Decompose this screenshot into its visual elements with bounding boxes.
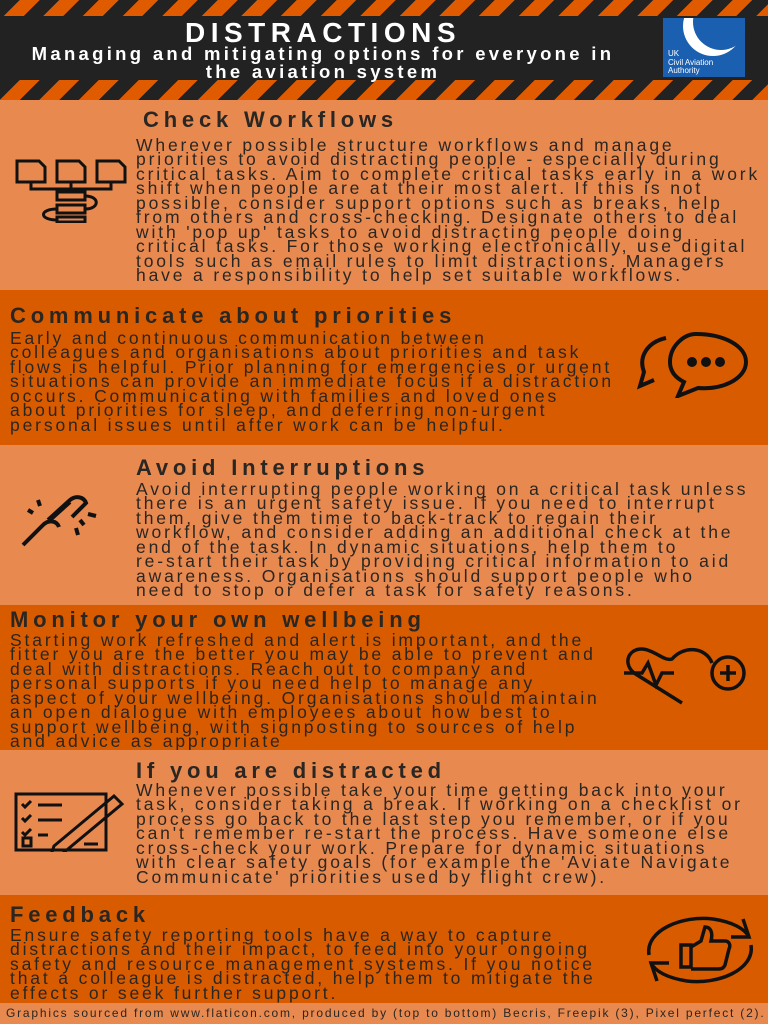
- text block: flows is helpful. Prior planning for emergencies or urgent: [10, 357, 612, 377]
- text block: from others and cross-checking. Designate others to deal: [136, 207, 739, 227]
- text block: [136, 479, 748, 600]
- icon: thumbs up cycle: [646, 916, 754, 984]
- text block: [10, 630, 600, 751]
- icon: broken chain: [22, 495, 96, 546]
- text block: distractions and their impact, to feed into your ongoing: [10, 939, 590, 959]
- panel: avoid interruptions: [0, 445, 768, 605]
- panel: if you are distracted: [0, 750, 768, 895]
- subtitle: the aviation system: [206, 61, 440, 82]
- text block: there is an urgent safety issue. If you need to interrupt: [136, 493, 717, 513]
- panel: monitor your own wellbeing: [0, 605, 768, 750]
- text block: Wherever possible structure workflows and manage: [136, 135, 675, 155]
- text block: have a responsibility to help set suitable workflows.: [136, 265, 683, 285]
- text block: Whenever possible take your time getting back into your: [136, 780, 728, 800]
- text block: fitter you are the better you may be able to prevent and: [10, 644, 596, 664]
- text block: that a colleague is distracted, help them to mitigate the: [10, 968, 596, 988]
- text block: safety and resource management systems. If you notice: [10, 954, 595, 974]
- subtitle: [32, 43, 614, 82]
- panel: communicate about priorities: [0, 290, 768, 445]
- text block: personal supports if you need help to manage any: [10, 673, 535, 693]
- text block: with clear safety goals (for example the 'Aviate Navigate: [136, 852, 732, 872]
- text block: [10, 925, 596, 1003]
- icon: checklist: [14, 792, 124, 852]
- text block: Starting work refreshed and alert is important, and the: [10, 630, 584, 650]
- heading: Monitor your own wellbeing: [10, 607, 426, 632]
- heading: If you are distracted: [136, 758, 446, 783]
- icon: heart with plus: [624, 647, 746, 704]
- subtitle: Managing and mitigating options for everyone in: [32, 43, 614, 64]
- icon: workflow: [16, 160, 126, 223]
- heading: Check Workflows: [143, 107, 398, 132]
- text block: colleagues and organisations about priorities and task: [10, 342, 581, 362]
- text block: critical tasks. For those working electronically, use digital: [136, 236, 747, 256]
- header: [0, 0, 768, 100]
- text block: an open dialogue with employees about how best to: [10, 702, 552, 722]
- logo: UK Civil Aviation Authority: Authority: [668, 66, 700, 75]
- text block: [136, 135, 760, 285]
- text block: with 'pop up' tasks to avoid distracting people doing: [136, 222, 685, 242]
- text block: awareness. Organisations should support people who: [136, 566, 695, 586]
- text block: shift when people are at their most alert. If this is not: [136, 178, 703, 198]
- text block: need to stop or defer a task for safety reasons.: [136, 580, 635, 600]
- text block: Communicate' priorities used by flight crew).: [136, 867, 607, 887]
- text block: Avoid interrupting people working on a critical task unless: [136, 479, 748, 499]
- text block: personal issues until after work can be helpful.: [10, 415, 506, 435]
- text block: Early and continuous communication between: [10, 328, 487, 348]
- text block: can't remember re-start the process. Have someone else: [136, 823, 731, 843]
- text block: critical tasks. Aim to complete critical tasks early in a work: [136, 164, 760, 184]
- text block: [136, 780, 743, 887]
- text block: deal with distractions. Reach out to company and: [10, 659, 528, 679]
- text block: re-start their task by providing critical information to aid: [136, 551, 731, 571]
- icon: chat bubbles: [637, 332, 748, 398]
- text block: process go back to the last step you remember, or if you: [136, 809, 730, 829]
- text block: and advice as appropriate: [10, 731, 283, 751]
- text block: tools such as email rules to limit distractions. Managers: [136, 251, 726, 271]
- text block: effects or seek further support.: [10, 983, 338, 1003]
- text block: priorities to avoid distracting people - especially during: [136, 149, 722, 169]
- text block: end of the task. In dynamic situations, help them to: [136, 537, 678, 557]
- logo: UK Civil Aviation Authority: UK: [668, 49, 679, 58]
- text block: them, give them time to back-track to regain their: [136, 508, 658, 528]
- heading: Feedback: [10, 902, 150, 927]
- text block: occurs. Communicating with families and loved ones: [10, 386, 559, 406]
- logo: UK Civil Aviation Authority: Civil Aviation: [668, 58, 713, 66]
- text block: [10, 328, 614, 435]
- text block: possible, consider support options such as breaks, help: [136, 193, 723, 213]
- title: DISTRACTIONS: [185, 17, 461, 48]
- logo: UK Civil Aviation Authority: [663, 18, 745, 77]
- text block: Ensure safety reporting tools have a way to capture: [10, 925, 554, 945]
- text block: cross-check your work. Prepare for dynamic situations: [136, 838, 707, 858]
- text block: support wellbeing, with signposting to sources of help: [10, 717, 577, 737]
- panel: check workflows: [0, 100, 768, 290]
- text block: aspect of your wellbeing. Organisations should maintain: [10, 688, 600, 708]
- text block: situations can provide an immediate focus if a distraction: [10, 371, 614, 391]
- panel: feedback: [0, 895, 768, 1003]
- heading: Communicate about priorities: [10, 303, 456, 328]
- text block: workflow, and consider adding an additional check at the: [136, 522, 733, 542]
- heading: Avoid Interruptions: [136, 455, 429, 480]
- text block: task, consider taking a break. If working on a checklist or: [136, 794, 743, 814]
- footer credits: Graphics sourced from www.flaticon.com, produced by (top to bottom) Becris, Freepik (3), Pixel perfect (2).: [6, 1006, 765, 1020]
- text block: about priorities for sleep, and deferring non-urgent: [10, 400, 547, 420]
